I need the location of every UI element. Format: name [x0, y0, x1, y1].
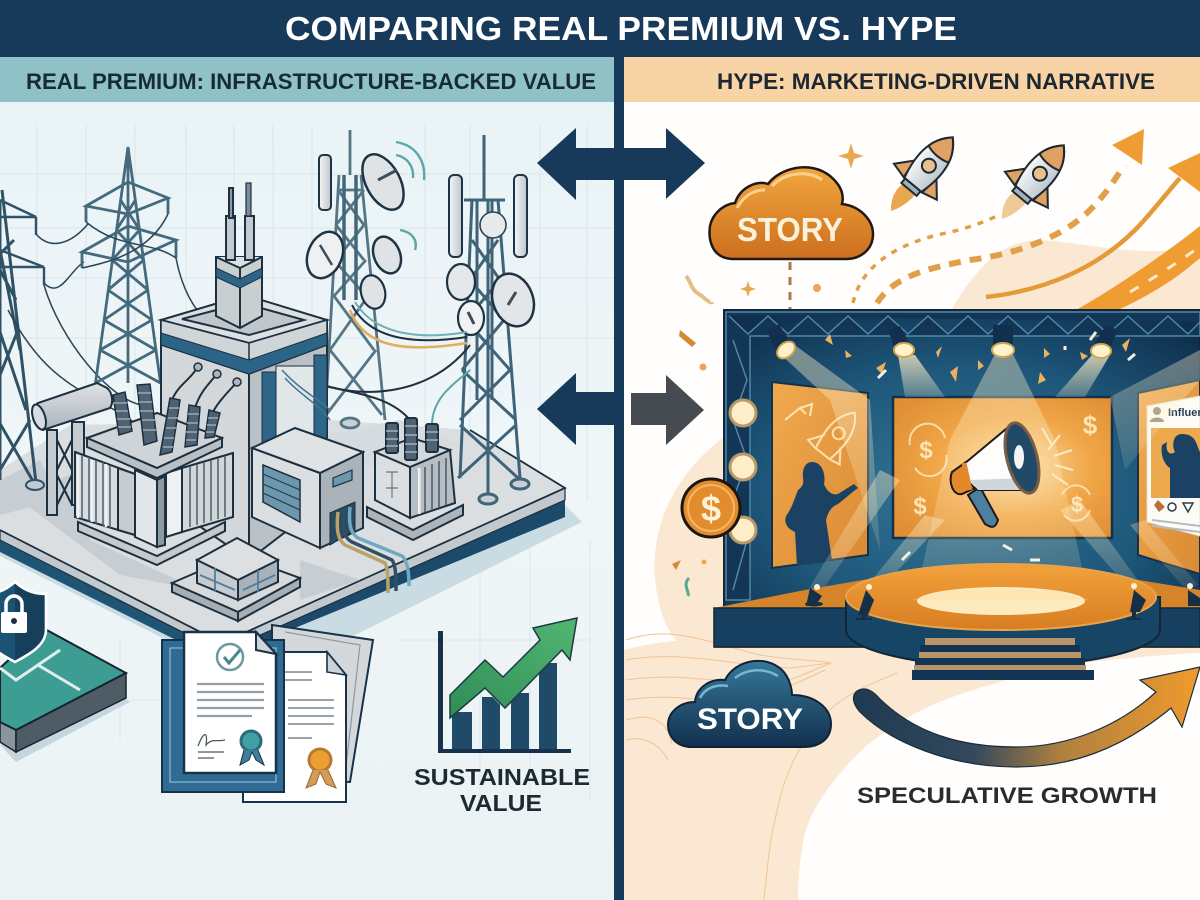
- icon: rocket two: [981, 127, 1085, 237]
- stage: centre screen: $: [919, 437, 933, 464]
- icon: dollar coin: [682, 479, 740, 537]
- cloud: story navy: STORY: [697, 703, 803, 736]
- bar chart: sustainable value: [438, 618, 577, 753]
- left panel background: [0, 100, 616, 900]
- transformer: large: [29, 383, 233, 565]
- peach background shapes: [624, 240, 1200, 900]
- label: speculative growth: SPECULATIVE GROWTH: [857, 783, 1157, 808]
- stage: centre screen: $: [913, 493, 927, 520]
- transformer: small: [367, 418, 463, 540]
- stage: centre screen: $: [1083, 410, 1098, 440]
- arrow: top left pointing: [537, 128, 616, 200]
- panel: hype: [620, 100, 1200, 900]
- small equipment block: [172, 538, 300, 621]
- telecom tower: right: [447, 135, 541, 504]
- stage: spotlight beams: [778, 346, 1200, 597]
- heading: hype: HYPE: MARKETING-DRIVEN NARRATIVE: [717, 69, 1155, 94]
- stage: backdrop and truss: [724, 310, 1200, 610]
- panel: real premium: [0, 100, 616, 900]
- icon: dollar coin: $: [701, 488, 721, 529]
- arrow: speculative growth swoosh: [853, 667, 1200, 767]
- stage: centre screen: [893, 397, 1112, 538]
- platform: [0, 420, 582, 668]
- heading: real premium: REAL PREMIUM: INFRASTRUCTURE-BACKED VALUE: [26, 69, 596, 94]
- heading: hype: [624, 57, 1200, 102]
- label: sustainable value: [414, 764, 590, 816]
- pylon: left: [0, 190, 142, 490]
- arrow: middle left pointing: [537, 373, 616, 445]
- icon: bulbs: [730, 400, 756, 543]
- icon: megaphone: [951, 419, 1045, 527]
- cables between towers: [280, 302, 470, 425]
- stage: floor and platforms: [714, 564, 1200, 680]
- icon: floor spotlights: [805, 583, 1200, 620]
- substation building: [161, 183, 330, 560]
- cloud: story orange: [710, 167, 873, 259]
- truss: [726, 312, 1200, 600]
- stage: left panel with silhouette: [772, 382, 870, 568]
- icon: rocket one: [870, 119, 974, 229]
- stage: influencer post screen: [1138, 380, 1200, 574]
- centre divider: [614, 56, 624, 900]
- cloud: story orange: STORY: [737, 211, 843, 248]
- arrow: top double headed right: [620, 128, 705, 199]
- label: sustainable value: SUSTAINABLE: [414, 764, 590, 790]
- arrows: dashed trajectories: [790, 129, 1200, 310]
- pylon: centre left: [82, 147, 206, 383]
- icon: documents and certificates: [162, 625, 373, 802]
- label: sustainable value: VALUE: [460, 790, 542, 816]
- telecom tower: middle: [300, 130, 460, 470]
- flowing contour lines: [626, 634, 897, 900]
- conduit cables: [337, 507, 409, 593]
- stage stairs: [912, 638, 1094, 680]
- cloud: story navy: [668, 661, 831, 747]
- icon: security tile with shield and lock: [0, 582, 130, 762]
- icon: top spotlights: [766, 324, 1135, 560]
- arrow: middle grey right: [631, 375, 704, 445]
- title: COMPARING REAL PREMIUM VS. HYPE: [285, 10, 957, 47]
- header band: [0, 0, 1200, 57]
- heading: real premium: [0, 57, 614, 102]
- icon: sparkles and confetti top: [672, 143, 864, 596]
- stage: centre screen: $: [1071, 492, 1083, 517]
- right panel background: [624, 100, 1200, 900]
- service building: [252, 428, 363, 548]
